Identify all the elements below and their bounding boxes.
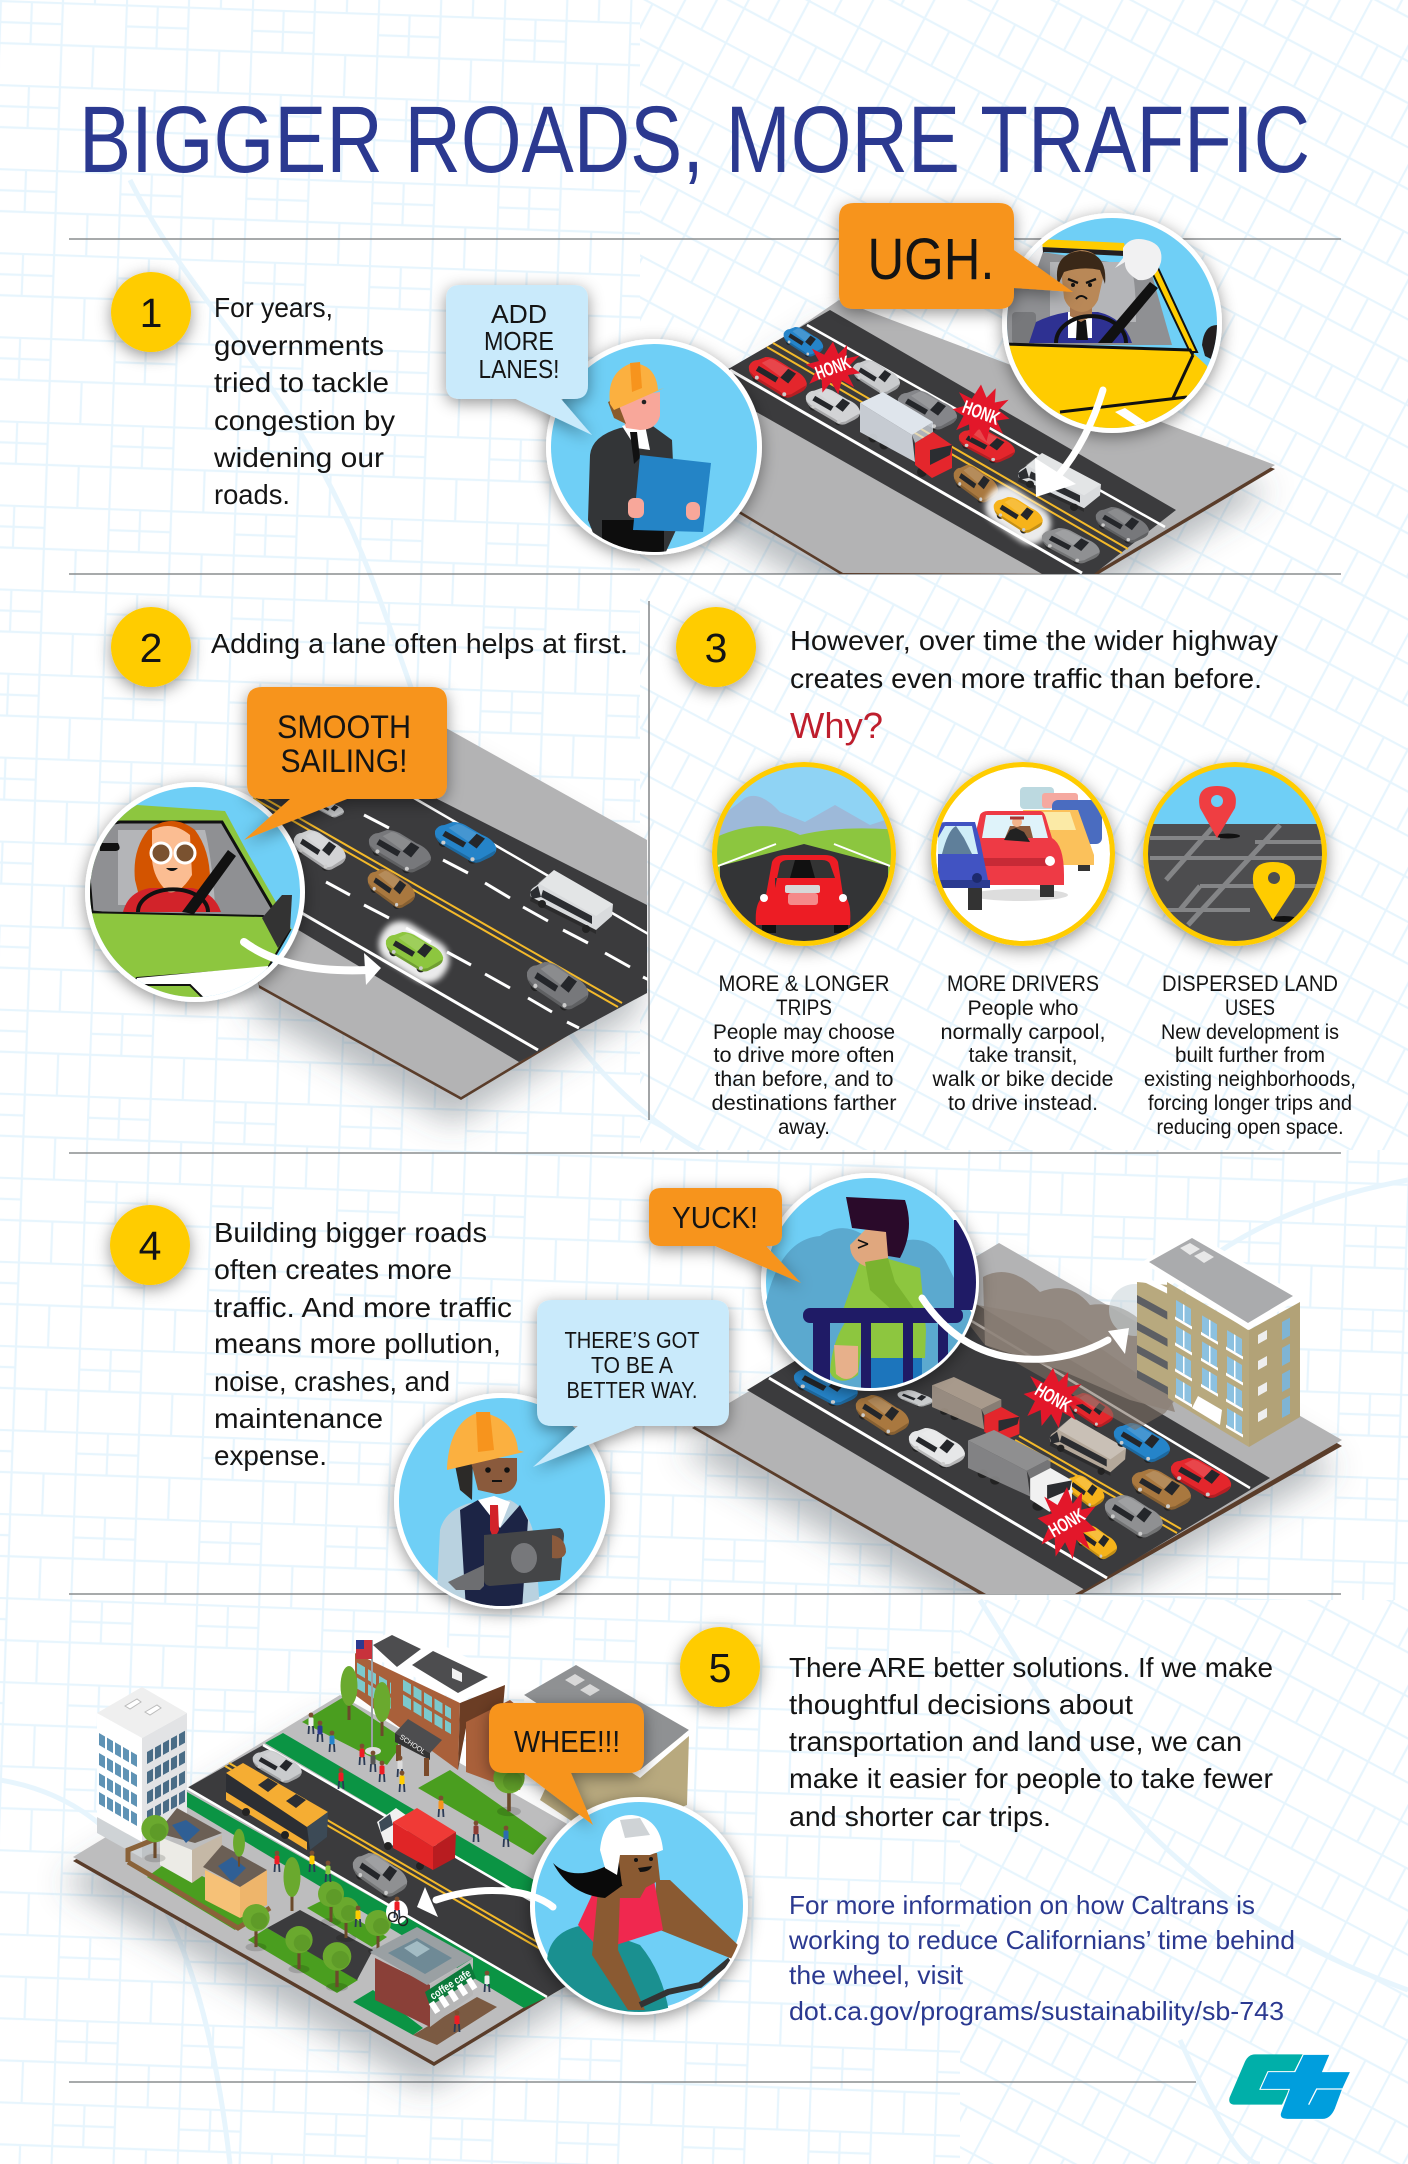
speech bubble: add more lanes	[446, 285, 592, 435]
step 4 text: traffic. And more traffic	[214, 1292, 512, 1323]
caption: more and longer trips	[712, 971, 896, 1139]
congested highway illustration	[708, 300, 1275, 574]
traffic cars	[749, 327, 1149, 564]
circle icon: dispersed land uses, map pins	[1143, 762, 1330, 949]
more information text: working to reduce Californians’ time behind	[788, 1925, 1295, 1955]
panel 5: better solutions	[73, 1627, 1295, 2066]
step number 5	[680, 1627, 760, 1707]
traffic cars and trucks	[794, 1367, 1231, 1560]
isometric livable street scene	[73, 1630, 701, 2066]
man on balcony in circle	[760, 1173, 979, 1400]
speech bubble: smooth sailing	[244, 687, 447, 840]
caption: more drivers: normally carpool,	[940, 1021, 1106, 1044]
step 1 text: roads.	[214, 479, 290, 510]
coffee cafe: coffee cafe	[428, 1967, 473, 2003]
step 2 text: Adding a lane often helps at first.	[211, 628, 628, 659]
coffee cafe	[353, 1927, 497, 2045]
open highway illustration	[250, 728, 650, 1100]
step 4 text: Building bigger roads	[214, 1217, 487, 1248]
speech bubble: there's got to be a better way: TO BE A	[591, 1352, 674, 1378]
step number 3	[676, 607, 756, 687]
caption: more drivers: People who	[968, 997, 1078, 1020]
houses and gardens	[128, 1808, 270, 1930]
step 5 text: thoughtful decisions about	[789, 1689, 1133, 1720]
vehicles on street	[226, 1750, 456, 1898]
step 1 text: governments	[214, 330, 384, 361]
speech bubble: there's got to be a better way: BETTER WAY.	[566, 1377, 698, 1403]
caption: dispersed land uses: USES	[1225, 995, 1275, 1020]
caption: more and longer trips: than before, and to	[714, 1068, 894, 1091]
arrow from driver to car	[1035, 390, 1103, 497]
white tower	[97, 1687, 187, 1858]
step 4 text: maintenance	[214, 1403, 383, 1434]
speech bubble: add more lanes: LANES!	[478, 354, 560, 384]
step 5 text: There ARE better solutions. If we make	[789, 1652, 1273, 1683]
honk burst: HONK	[1031, 1380, 1075, 1417]
caption: dispersed land uses: New development is	[1161, 1021, 1339, 1044]
street trees	[141, 1666, 525, 1992]
caption: more drivers: take transit,	[968, 1044, 1078, 1067]
speech bubble: yuck	[649, 1188, 801, 1283]
arrow from driver to car	[244, 942, 381, 985]
caption: more drivers: walk or bike decide	[931, 1068, 1114, 1091]
park	[248, 1900, 387, 1993]
cyclist in circle	[530, 1797, 748, 2020]
caption: dispersed land uses: built further from	[1175, 1044, 1325, 1067]
caption: more drivers	[931, 971, 1114, 1115]
caption: more and longer trips: away.	[778, 1116, 830, 1139]
caption: dispersed land uses: forcing longer trips and	[1148, 1092, 1352, 1115]
step 1 text: widening our	[213, 442, 384, 473]
speech bubble: yuck: YUCK!	[672, 1200, 758, 1235]
step number 3: 3	[705, 625, 727, 671]
circle icon: longer trips, car on a road	[710, 762, 900, 950]
caption: more drivers: MORE DRIVERS	[947, 971, 1099, 996]
caption: dispersed land uses: DISPERSED LAND	[1162, 971, 1338, 996]
school building: SCHOOL	[398, 1734, 426, 1756]
step number 4: 4	[139, 1223, 161, 1269]
caption: more and longer trips: People may choose	[713, 1021, 895, 1044]
step number 2	[111, 607, 191, 687]
honk burst	[1024, 1368, 1082, 1428]
speech bubble: whee	[489, 1703, 644, 1825]
angry driver in circle	[1000, 213, 1222, 450]
more information text: dot.ca.gov/programs/sustainability/sb-743	[789, 1996, 1284, 2026]
tan apartment building	[524, 1665, 689, 1840]
caption: dispersed land uses: reducing open space.	[1156, 1116, 1344, 1139]
smog cloud	[950, 1272, 1175, 1430]
step 4 text	[214, 1217, 512, 1471]
school building	[355, 1630, 540, 1790]
engineer in circle	[546, 339, 762, 560]
step 4 text: noise, crashes, and	[214, 1366, 450, 1397]
honk burst	[952, 384, 1010, 442]
caption: more and longer trips: destinations farther	[712, 1092, 896, 1115]
caltrans logo	[1229, 2054, 1351, 2119]
panel 1: governments widen roads	[101, 196, 1275, 574]
speech bubble: there's got to be a better way: THERE’S GOT	[564, 1327, 700, 1353]
step number 1: 1	[140, 290, 162, 336]
speech bubble: there's got to be a better way	[533, 1300, 729, 1467]
step number 4	[110, 1205, 190, 1285]
step 5 text: transportation and land use, we can	[789, 1726, 1242, 1757]
speech bubble: add more lanes: MORE	[484, 326, 554, 356]
step 1 text: tried to tackle	[214, 367, 389, 398]
caption: more and longer trips: TRIPS	[776, 995, 832, 1020]
caption: more drivers: to drive instead.	[948, 1092, 1098, 1115]
more information text: For more information on how Caltrans is	[789, 1890, 1255, 1920]
more information text	[788, 1890, 1295, 2026]
step number 2: 2	[140, 625, 162, 671]
speech bubble: smooth sailing: SMOOTH	[277, 709, 411, 745]
circle icon: more drivers in traffic	[930, 762, 1115, 946]
caption: dispersed land uses	[1144, 971, 1356, 1139]
honk burst: HONK	[1046, 1505, 1089, 1542]
step 3 text: creates even more traffic than before.	[790, 663, 1262, 694]
step number 1	[111, 272, 191, 352]
caption: more and longer trips: MORE & LONGER	[718, 971, 890, 996]
step 1 text: For years,	[214, 292, 333, 323]
step 5 text	[789, 1652, 1273, 1832]
step 1 text: congestion by	[214, 405, 395, 436]
speech bubble: ugh	[839, 203, 1073, 309]
step number 5: 5	[709, 1645, 731, 1691]
smoggy highway and apartment illustration	[692, 1232, 1342, 1598]
speech bubble: ugh: UGH.	[868, 227, 994, 292]
panel 2: adding a lane helps	[80, 607, 650, 1100]
step 5 text: and shorter car trips.	[789, 1801, 1051, 1832]
honk burst: HONK	[813, 352, 854, 384]
honk burst	[1038, 1487, 1096, 1559]
road and bike lanes	[265, 1733, 640, 1954]
speech bubble: add more lanes: ADD	[491, 299, 547, 329]
arrow from man to building	[922, 1298, 1129, 1359]
speech bubble: smooth sailing: SAILING!	[280, 743, 408, 779]
caption: more and longer trips: to drive more often	[714, 1044, 894, 1067]
more information text: the wheel, visit	[789, 1960, 964, 1990]
step 4 text: means more pollution,	[214, 1328, 501, 1359]
smiling driver in circle	[80, 782, 305, 1002]
cars on open road	[294, 800, 613, 1010]
honk burst: HONK	[959, 397, 1002, 430]
speech bubble: whee: WHEE!!!	[514, 1724, 620, 1759]
upper lawn and sidewalk	[283, 1698, 700, 1940]
honk burst	[806, 342, 860, 394]
panel 4: pollution and costs	[110, 1173, 1342, 1610]
step 1 text	[213, 292, 395, 510]
pedestrians and cyclists	[274, 1713, 508, 2032]
arrow from cyclist to bike	[417, 1887, 553, 1917]
step 4 text: expense.	[214, 1440, 327, 1471]
why heading: Why?	[790, 705, 883, 746]
step 4 text: often creates more	[214, 1254, 452, 1285]
engineer with tablet in circle	[394, 1393, 610, 1610]
panel 3: why traffic grows	[676, 607, 1356, 1139]
step 3 text	[790, 625, 1278, 694]
step 3 text: However, over time the wider highway	[790, 625, 1278, 656]
caption: dispersed land uses: existing neighborhoods,	[1144, 1068, 1356, 1091]
apartment building	[1136, 1232, 1302, 1447]
step 5 text: make it easier for people to take fewer	[789, 1763, 1273, 1794]
